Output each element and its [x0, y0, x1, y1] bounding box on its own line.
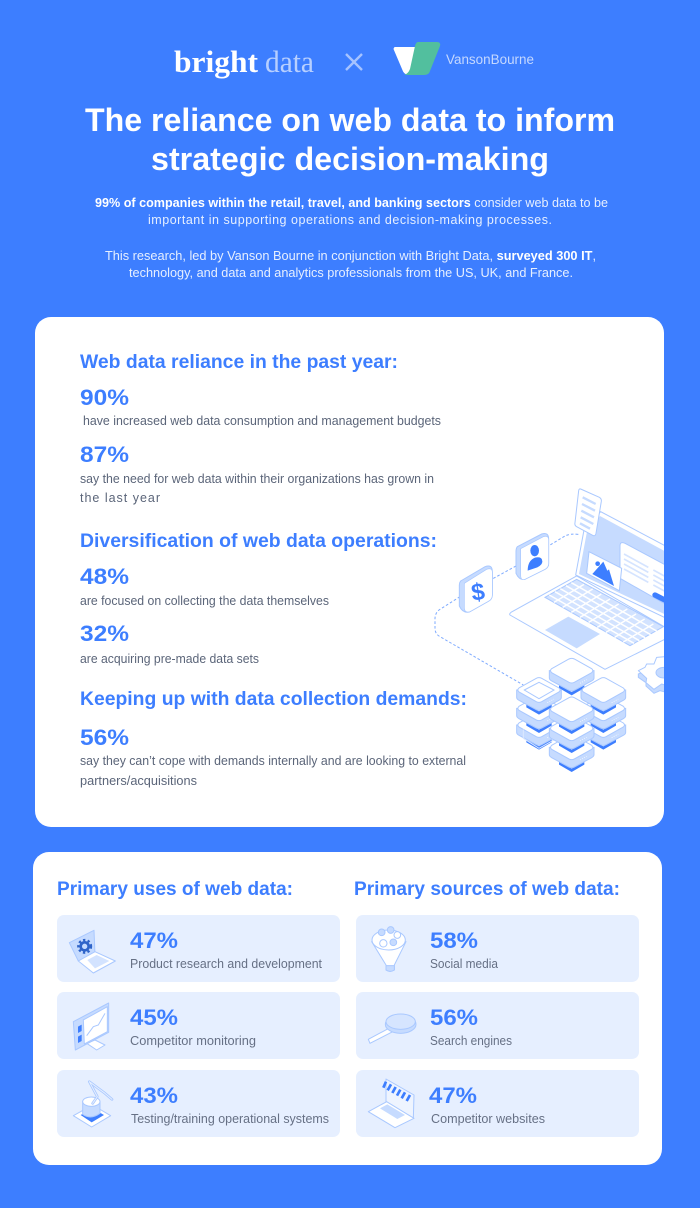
card: testing and training — [57, 1070, 340, 1137]
icon: laptop with gear — [69, 930, 115, 973]
stat: 56%: 56% — [80, 725, 129, 750]
stat: 48%: are focused on collecting the data themselves — [80, 594, 329, 608]
logo: Bright Data: bright — [174, 44, 259, 79]
server stacks — [517, 658, 626, 772]
card: competitor websites: Competitor websites — [431, 1111, 545, 1126]
stat: 32%: are acquiring pre-made data sets — [80, 652, 259, 666]
card: competitor websites — [356, 1070, 639, 1137]
icon: dollar badge — [459, 566, 492, 612]
card: testing and training: Testing/training operational systems — [131, 1111, 329, 1126]
stat: 32%: 32% — [80, 621, 129, 646]
stat: 87%: say the need for web data within their organizations has grown in — [80, 472, 434, 486]
intro paragraph 2 — [105, 248, 596, 280]
card: search engines: 56% — [430, 1005, 478, 1030]
card: testing and training: 43% — [130, 1083, 178, 1108]
logo: Vanson Bourne: VansonBourne — [446, 52, 534, 67]
logo: Bright Data — [174, 44, 314, 79]
intro paragraph 2: technology, and data and analytics professionals from the US, UK, and France. — [129, 265, 573, 280]
stat: 87%: the last year — [80, 491, 160, 505]
icon: funnel — [372, 927, 406, 971]
card: competitor monitoring — [57, 992, 340, 1059]
card: social media: 58% — [430, 928, 478, 953]
icon: user badge — [516, 533, 549, 580]
card: social media — [356, 915, 639, 982]
panel background — [33, 852, 662, 1165]
stat: 87% — [80, 442, 434, 505]
panel: web data reliance — [35, 317, 672, 827]
stat: 48% — [80, 564, 329, 608]
icon: magnifying glass — [368, 1014, 416, 1043]
icon: times separator — [346, 54, 362, 70]
panel background — [35, 317, 664, 827]
laptop screen — [576, 512, 670, 620]
stat: 48%: 48% — [80, 564, 129, 589]
intro paragraph 2: This research, led by Vanson Bourne in conjunction with Bright Data, surveyed 300 IT, — [105, 248, 596, 263]
card: competitor monitoring: Competitor monitoring — [130, 1033, 256, 1048]
card: search engines — [356, 992, 639, 1059]
illustration: laptop and servers — [435, 489, 672, 772]
stat: 56%: say they can’t cope with demands internally and are looking to external — [80, 754, 466, 768]
heading: primary sources: Primary sources of web data: — [354, 879, 620, 900]
heading: primary uses: Primary uses of web data: — [57, 879, 293, 900]
laptop base — [510, 576, 670, 669]
floating document — [575, 489, 601, 536]
icon: dollar badge: $ — [470, 578, 487, 607]
icon: laptop storefront — [368, 1079, 414, 1128]
stat: 90%: 90% — [80, 385, 129, 410]
card: product research: 47% — [130, 928, 178, 953]
card: competitor websites: 47% — [429, 1083, 477, 1108]
icon: monitor chart — [73, 1003, 109, 1050]
stat: 56% — [80, 725, 466, 788]
stat: 90% — [80, 385, 441, 428]
icon: robot arm — [73, 1082, 112, 1127]
title: strategic decision-making — [151, 141, 549, 177]
card: search engines: Search engines — [430, 1033, 512, 1048]
stat: 90%: have increased web data consumption and management budgets — [83, 414, 441, 428]
title: The reliance on web data to inform — [85, 102, 615, 138]
card: social media: Social media — [430, 956, 499, 971]
card: product research — [57, 915, 340, 982]
panel: uses and sources — [33, 852, 662, 1165]
intro paragraph 1: important in supporting operations and decision-making processes. — [148, 213, 552, 227]
stat: 32% — [80, 621, 259, 666]
title — [85, 102, 615, 177]
intro paragraph 1: 99% of companies within the retail, travel, and banking sectors consider web data to be — [95, 195, 608, 210]
intro paragraph 1 — [95, 195, 608, 227]
logo: Bright Data: data — [265, 44, 314, 79]
card: competitor monitoring: 45% — [130, 1005, 178, 1030]
stat: 87%: 87% — [80, 442, 129, 467]
gear — [638, 656, 664, 694]
dashed connection line — [435, 534, 578, 685]
card: product research: Product research and development — [130, 956, 322, 971]
heading: keeping up: Keeping up with data collection demands: — [80, 689, 467, 710]
stat: 56%: partners/acquisitions — [80, 774, 197, 788]
heading: web data reliance: Web data reliance in the past year: — [80, 352, 398, 373]
heading: diversification: Diversification of web data operations: — [80, 531, 437, 552]
logo: Vanson Bourne — [394, 42, 534, 75]
